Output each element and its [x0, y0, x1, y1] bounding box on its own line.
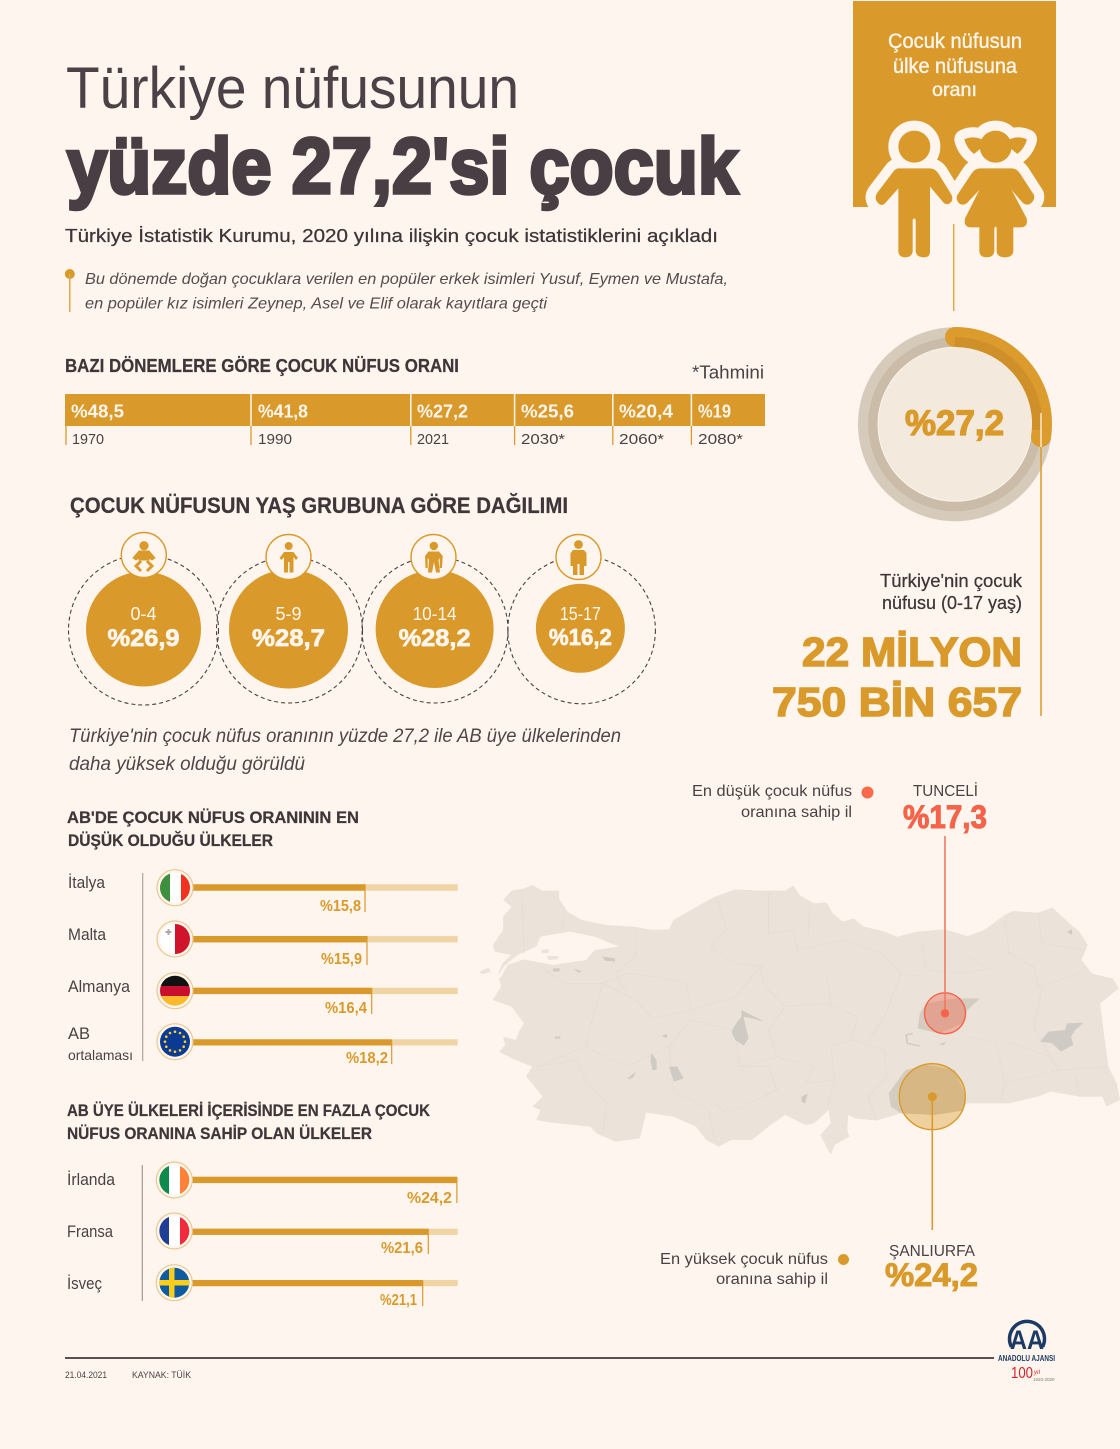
- bar: Ireland: %24,2: [407, 1190, 452, 1207]
- circle: 10-14: [362, 534, 508, 703]
- panel heading: ülke nüfusuna: [893, 55, 1017, 78]
- stat: child population: Türkiye'nin çocuk: [880, 571, 1023, 591]
- circle: 5-9: %28,7: [252, 625, 325, 652]
- heading: NÜFUS ORANINA SAHİP OLAN ÜLKELER: [67, 1124, 372, 1143]
- circle: 15-17: %16,2: [549, 624, 612, 650]
- circle: 10-14: %28,2: [399, 625, 471, 652]
- label: highest province: oranına sahip il: [716, 1271, 828, 1288]
- bar: Malta: [68, 921, 458, 968]
- logo: Anadolu Ajansı: AA: [1010, 1325, 1044, 1355]
- bar: Germany: [68, 973, 458, 1017]
- chart: donut 27.2 percent: %27,2: [905, 404, 1004, 443]
- panel heading: oranı: [932, 80, 977, 101]
- stat: child population: 750 BİN 657: [772, 679, 1022, 725]
- panel: highest EU countries: [67, 1101, 458, 1309]
- logo: Anadolu Ajansı: yıl: [1033, 1370, 1041, 1376]
- timeline band: 2030*: [521, 431, 565, 448]
- callout: popular names: [65, 269, 728, 312]
- label: lowest province: [692, 781, 987, 835]
- chart: age group circles: [68, 532, 655, 705]
- stat: child population: nüfusu (0-17 yaş): [882, 593, 1022, 613]
- bar: EU average: AB: [68, 1025, 90, 1043]
- timeline band: 1990: [258, 431, 292, 448]
- text block: comparison with EU: daha yüksek olduğu görüldü: [69, 754, 305, 775]
- connector line: [1040, 447, 1042, 716]
- bar: Malta: %15,9: [321, 951, 362, 968]
- bar: France: [67, 1213, 458, 1257]
- logo: Anadolu Ajansı: ANADOLU AJANSI: [998, 1354, 1055, 1363]
- label: lowest province: TUNCELİ: [913, 781, 978, 800]
- timeline band: %48,5: [71, 402, 124, 422]
- bar: EU average: ortalaması: [68, 1047, 133, 1063]
- label: highest province: ŞANLIURFA: [889, 1243, 975, 1260]
- heading: AB ÜYE ÜLKELERİ İÇERİSİNDE EN FAZLA ÇOCUK: [67, 1101, 431, 1120]
- bar: EU average: [68, 1024, 458, 1067]
- timeline band: 2021: [417, 431, 449, 448]
- timeline band: %19: [698, 402, 731, 422]
- label: highest province: En yüksek çocuk nüfus: [660, 1251, 828, 1268]
- heading: age groups: ÇOCUK NÜFUSUN YAŞ GRUBUNA GÖRE DAĞILIMI: [70, 493, 568, 518]
- timeline band: 2060*: [619, 431, 664, 448]
- panel: lowest EU countries: [67, 808, 458, 1067]
- bar: Germany: Almanya: [68, 978, 131, 996]
- bar: Italy: %15,8: [320, 898, 361, 915]
- timeline band: %25,6: [521, 402, 574, 422]
- text block: comparison with EU: [69, 726, 621, 775]
- callout: popular names: Bu dönemde doğan çocuklara verilen en popüler erkek isimleri Yusuf, Eymen ve Mustafa,: [85, 271, 728, 288]
- bar: Sweden: [67, 1265, 458, 1309]
- title: yüzde 27,2'si çocuk: [67, 121, 739, 210]
- bar: Malta: Malta: [68, 926, 107, 944]
- text block: comparison with EU: Türkiye'nin çocuk nüfus oranının yüzde 27,2 ile AB üye ülkelerinden: [69, 726, 621, 747]
- bar: Sweden: %21,1: [380, 1292, 417, 1309]
- bar: Ireland: [67, 1162, 457, 1207]
- callout: popular names: en popüler kız isimleri Zeynep, Asel ve Elif olarak kayıtlara geçti: [85, 296, 547, 312]
- marker: Tunceli: [924, 836, 966, 1034]
- heading: DÜŞÜK OLDUĞU ÜLKELER: [68, 831, 273, 850]
- heading: [67, 1101, 431, 1143]
- timeline band: %41,8: [258, 402, 308, 422]
- footer: [65, 1358, 994, 1380]
- panel heading: Çocuk nüfusun: [888, 30, 1022, 53]
- label: lowest province: %17,3: [903, 799, 987, 835]
- label: lowest province: oranına sahip il: [741, 804, 852, 821]
- bar: Ireland: İrlanda: [67, 1170, 116, 1189]
- subtitle: Türkiye İstatistik Kurumu, 2020 yılına ilişkin çocuk istatistiklerini açıkladı: [65, 226, 718, 246]
- panel: child population ratio by period: [65, 356, 765, 448]
- label: lowest province: En düşük çocuk nüfus: [692, 783, 852, 800]
- map: Türkiye provinces: [479, 885, 1120, 1155]
- note: estimate: *Tahmini: [692, 362, 764, 382]
- circle: 5-9: [216, 534, 362, 703]
- bar: Germany: %16,4: [325, 1000, 367, 1017]
- timeline band: 1970: [72, 431, 104, 448]
- timeline band: [65, 394, 765, 448]
- stat: child population: [772, 571, 1023, 725]
- logo: Anadolu Ajansı: 100: [1011, 1365, 1033, 1382]
- bar: EU average: %18,2: [346, 1050, 388, 1067]
- icon: boy and girl: [876, 131, 1034, 257]
- circle: 10-14: 10-14: [413, 604, 457, 624]
- title: [66, 56, 739, 210]
- timeline band: %27,2: [417, 402, 468, 422]
- marker: Şanlıurfa: [899, 1064, 965, 1230]
- label: highest province: %24,2: [885, 1257, 978, 1293]
- logo: Anadolu Ajansı: [998, 1321, 1055, 1382]
- circle: 0-4: 0-4: [130, 604, 157, 624]
- bar: France: %21,6: [381, 1240, 423, 1257]
- logo: Anadolu Ajansı: 1920-2020: [1033, 1377, 1055, 1382]
- circle: 0-4: [68, 532, 218, 705]
- circle: 15-17: [508, 534, 655, 704]
- circle: 0-4: %26,9: [108, 625, 180, 652]
- title: Türkiye nüfusunun: [66, 56, 519, 121]
- heading: AB'DE ÇOCUK NÜFUS ORANININ EN: [67, 808, 359, 827]
- bar: Italy: İtalya: [68, 873, 106, 892]
- bar: Italy: [68, 870, 458, 915]
- footer: KAYNAK: TÜİK: [132, 1370, 191, 1380]
- bar: Sweden: İsveç: [67, 1274, 102, 1293]
- chart: donut 27.2 percent: [858, 327, 1052, 521]
- label: highest province: [660, 1243, 978, 1293]
- timeline band: %20,4: [619, 402, 673, 422]
- heading: [67, 808, 359, 850]
- stat: child population: 22 MİLYON: [802, 629, 1022, 675]
- circle: 15-17: 15-17: [560, 604, 601, 624]
- footer: 21.04.2021: [65, 1370, 107, 1380]
- timeline band: 2080*: [698, 431, 743, 448]
- bar: France: Fransa: [67, 1223, 114, 1241]
- panel: child share header: [853, 1, 1056, 311]
- panel heading: [888, 30, 1022, 101]
- heading: BAZI DÖNEMLERE GÖRE ÇOCUK NÜFUS ORANI: [65, 356, 459, 376]
- circle: 5-9: 5-9: [275, 604, 302, 624]
